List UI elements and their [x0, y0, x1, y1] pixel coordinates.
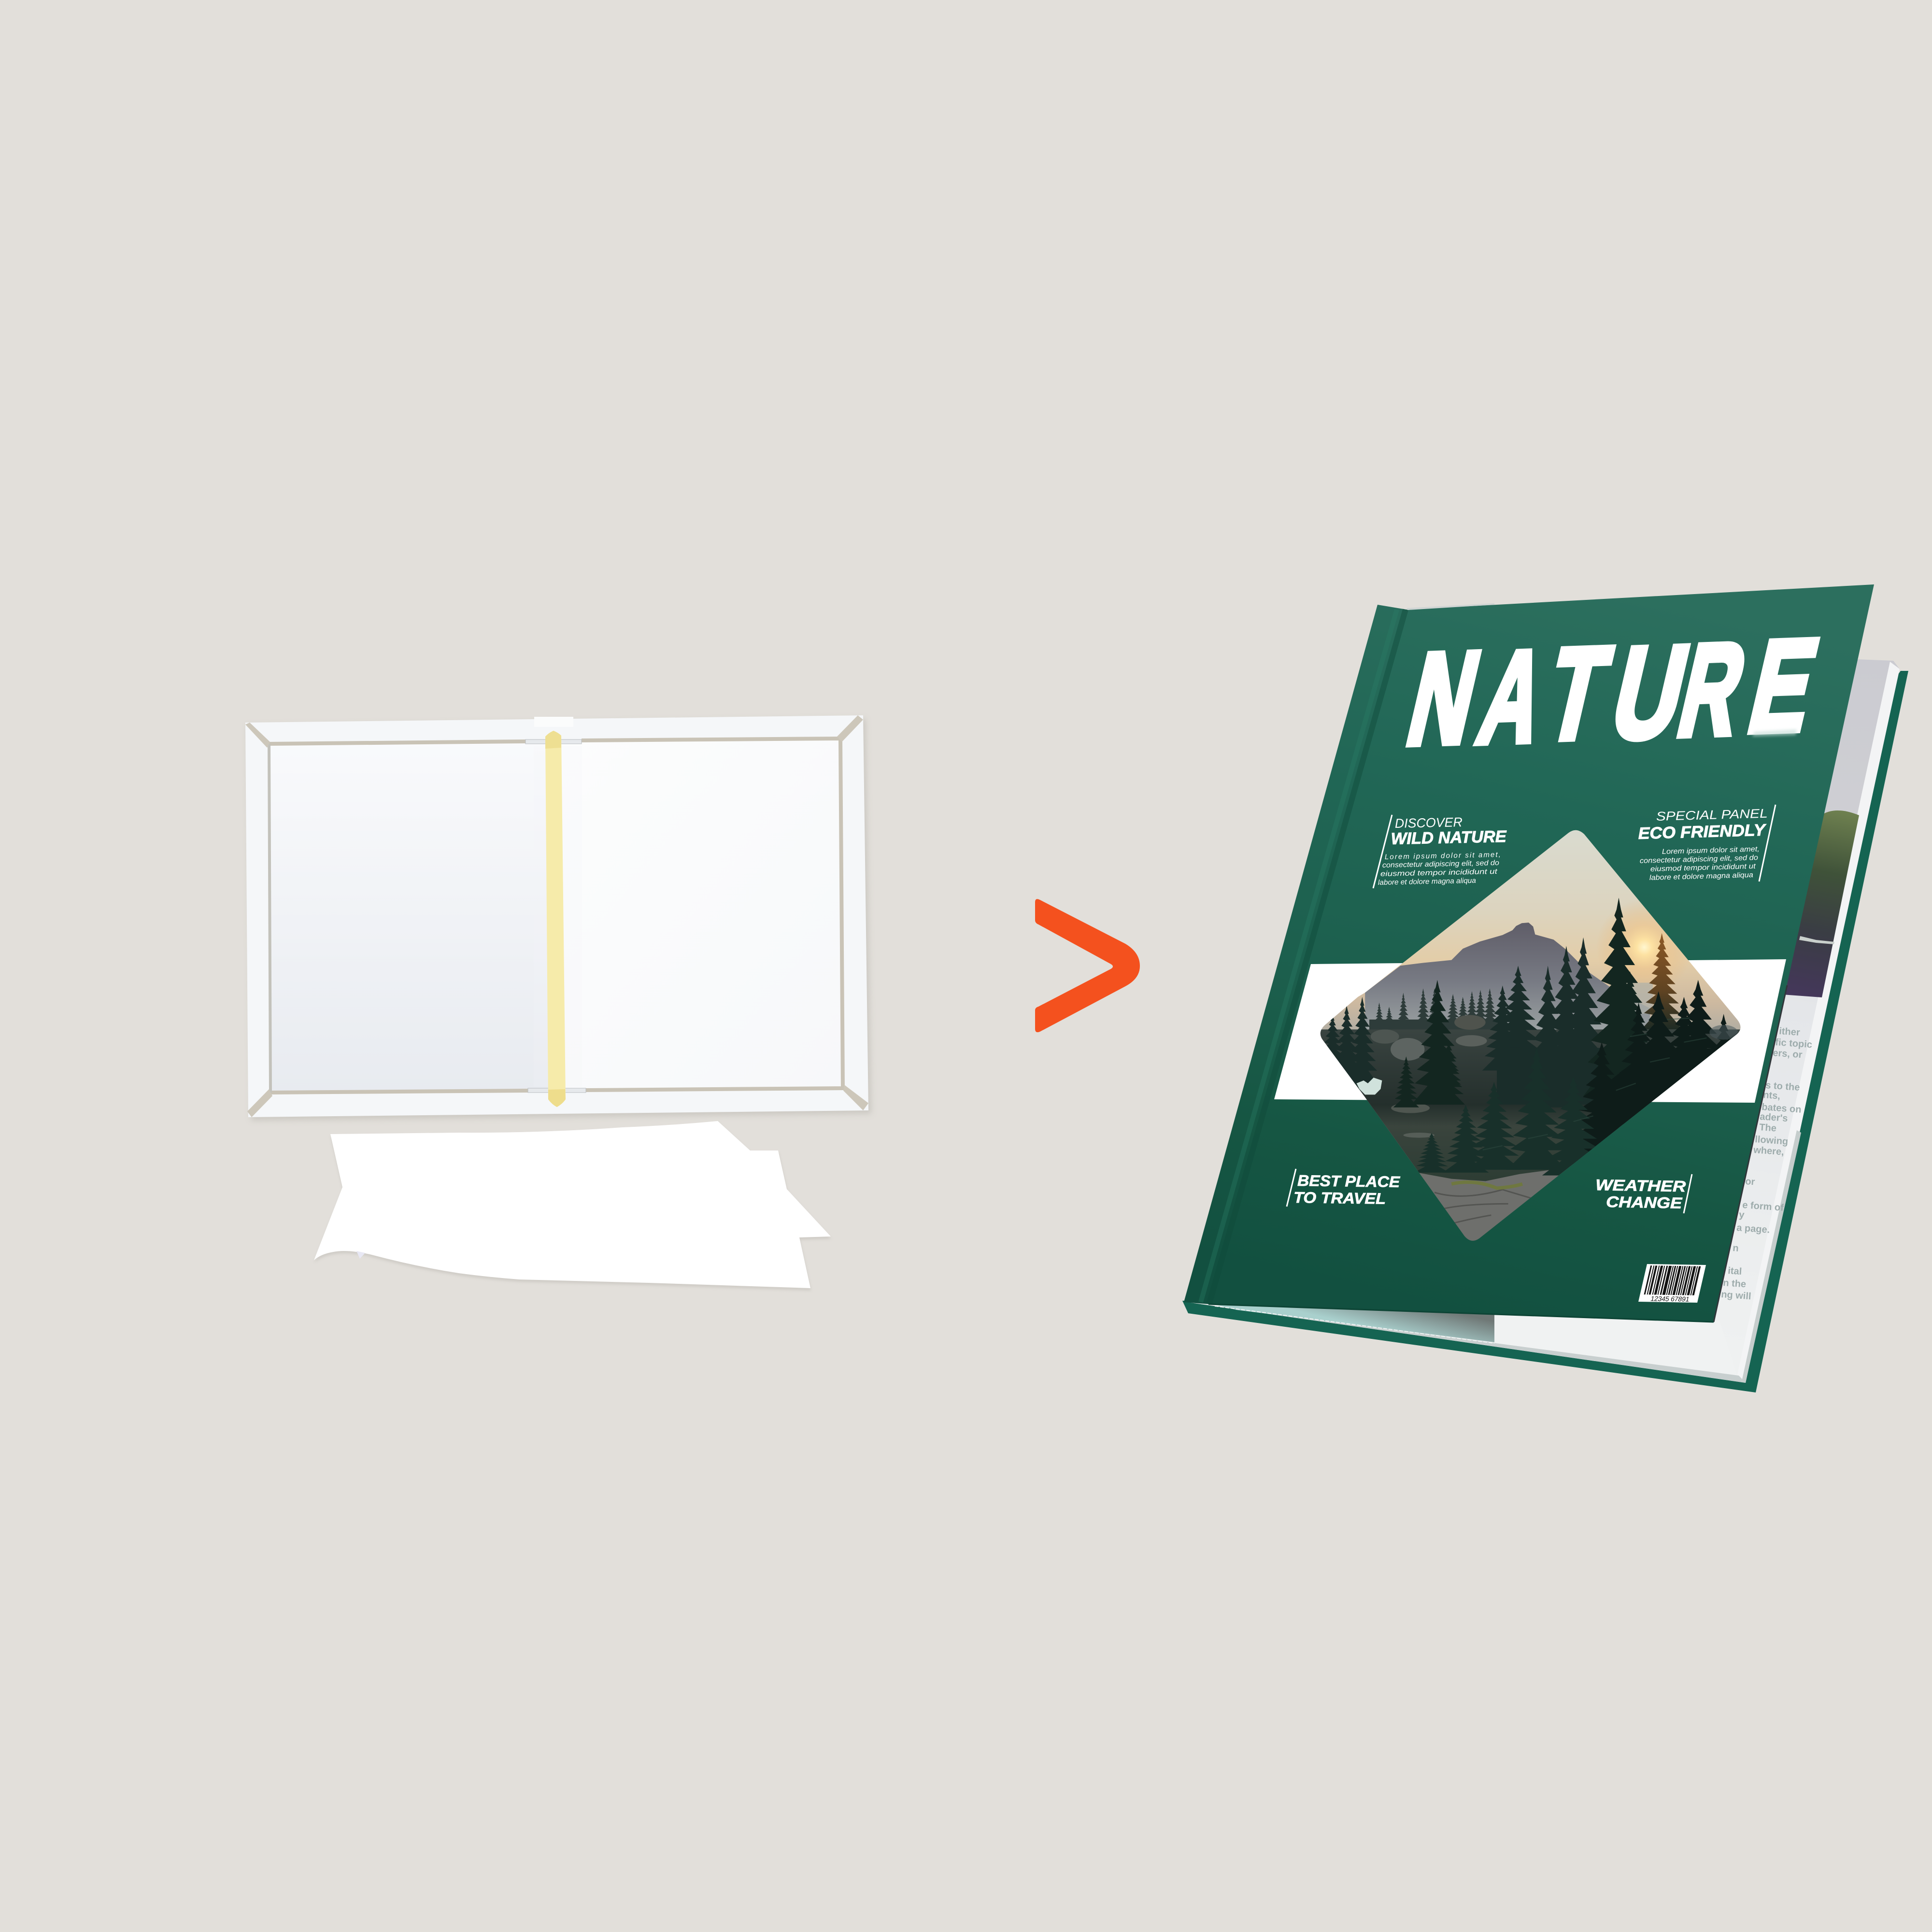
inner page text: The [1759, 1122, 1777, 1134]
inner page text: n the [1723, 1278, 1747, 1290]
inner page text: n [1733, 1243, 1739, 1254]
title: NATURE: E [1738, 611, 1829, 760]
inner page text: ng will [1721, 1289, 1751, 1302]
page block [1187, 659, 1900, 1383]
bottom left label: best place to travel: BEST PLACE [1297, 1172, 1401, 1191]
page edge highlight [1736, 662, 1900, 1383]
inner page photo [1782, 810, 1859, 997]
bottom page edge [1187, 1302, 1746, 1383]
right feature block: special panel eco friendly: eiusmod tempor incididunt ut [1650, 862, 1756, 873]
left feature block: discover wild nature: eiusmod tempor incididunt ut [1380, 867, 1498, 878]
sunlit tree [1641, 933, 1682, 1029]
right feature block: special panel eco friendly: ECO FRIENDLY [1638, 821, 1767, 843]
title: NATURE: U [1600, 619, 1700, 767]
inner page text: ither [1779, 1026, 1801, 1038]
spine gaps [526, 739, 586, 1093]
barcode: 12345 67891 [1650, 1295, 1690, 1304]
inner page text: y [1739, 1209, 1745, 1221]
hardcover magazine book [1182, 584, 1908, 1392]
back cover [1182, 671, 1908, 1392]
diamond landscape photo [1315, 827, 1747, 1246]
open blank book case [245, 715, 871, 1121]
spine tab [534, 717, 573, 727]
inner page text: nts, [1763, 1090, 1781, 1101]
right inner page [555, 739, 843, 1090]
inner page text: ital [1728, 1265, 1742, 1277]
bottom left label: best place to travel [1287, 1169, 1401, 1208]
stitch line [1215, 1306, 1494, 1343]
near conifers [1316, 938, 1616, 1108]
inner page text: s to the [1765, 1080, 1800, 1093]
board outer frame [245, 715, 868, 1117]
page shadow under cover [1213, 1304, 1494, 1342]
inner page text: where, [1753, 1145, 1784, 1157]
right feature block: special panel eco friendly: Lorem ipsum dolor sit amet, [1662, 845, 1760, 856]
inner page text: fic topic [1775, 1037, 1813, 1050]
sky [1315, 827, 1747, 1246]
right feature block: special panel eco friendly [1638, 805, 1776, 882]
left feature block: discover wild nature: DISCOVER [1394, 815, 1463, 831]
bottom left label: best place to travel: TO TRAVEL [1293, 1189, 1386, 1208]
dark foreground tree mass [1563, 980, 1747, 1173]
inner page text [1721, 1026, 1813, 1302]
title: NATURE: A [1468, 624, 1558, 771]
right feature block: special panel eco friendly: labore et dolore magna aliqua [1649, 871, 1753, 882]
left feature block: discover wild nature [1373, 815, 1507, 888]
mountain [1365, 923, 1650, 1042]
inner page text: ader's [1760, 1111, 1788, 1124]
distant tree line [1369, 988, 1500, 1038]
left feature block: discover wild nature: Lorem ipsum dolor sit amet, [1385, 851, 1501, 861]
inner page text: a page. [1736, 1222, 1770, 1236]
left feature block: discover wild nature: labore et dolore magna aliqua [1378, 877, 1476, 887]
left feature block: discover wild nature: WILD NATURE [1391, 827, 1507, 848]
title: NATURE: R [1667, 616, 1758, 764]
arrow: orange chevron [1035, 899, 1140, 1032]
barcode [1638, 1264, 1706, 1304]
branch highlights [1483, 1018, 1706, 1150]
rock foreground [1418, 1168, 1574, 1246]
title: NATURE: T [1534, 619, 1621, 767]
title: NATURE: N [1396, 625, 1492, 772]
inner page text: llowing [1755, 1134, 1789, 1147]
mid ground with rocks [1315, 1029, 1741, 1245]
inner page text: e form of [1742, 1200, 1784, 1213]
inner page text: or [1745, 1176, 1755, 1187]
yellow spine strip [545, 731, 566, 1107]
inner page text: bates on [1762, 1102, 1802, 1115]
tan frame [269, 739, 843, 1093]
lower green conifers [1414, 1048, 1605, 1176]
white-teal speck [1357, 1078, 1382, 1094]
tan corners [245, 715, 868, 1117]
bottom right label: weather change: WEATHER [1595, 1176, 1686, 1195]
title: NATURE [1396, 611, 1829, 772]
distant haze right [1613, 983, 1653, 1014]
bottom right label: weather change: CHANGE [1606, 1193, 1683, 1212]
inner page text: ers, or [1773, 1048, 1803, 1060]
cover white band [1274, 959, 1786, 1103]
bottom right label: weather change [1595, 1174, 1692, 1213]
left inner page [269, 740, 558, 1093]
bottom page area [1494, 1315, 1739, 1380]
right feature block: special panel eco friendly: consectetur adipiscing elit, sed do [1640, 853, 1758, 865]
loose white paper sheets [314, 1121, 831, 1291]
right feature block: special panel eco friendly: SPECIAL PANEL [1656, 806, 1768, 824]
left feature block: discover wild nature: consectetur adipiscing elit, sed do [1382, 859, 1499, 869]
front cover [1184, 584, 1874, 1322]
